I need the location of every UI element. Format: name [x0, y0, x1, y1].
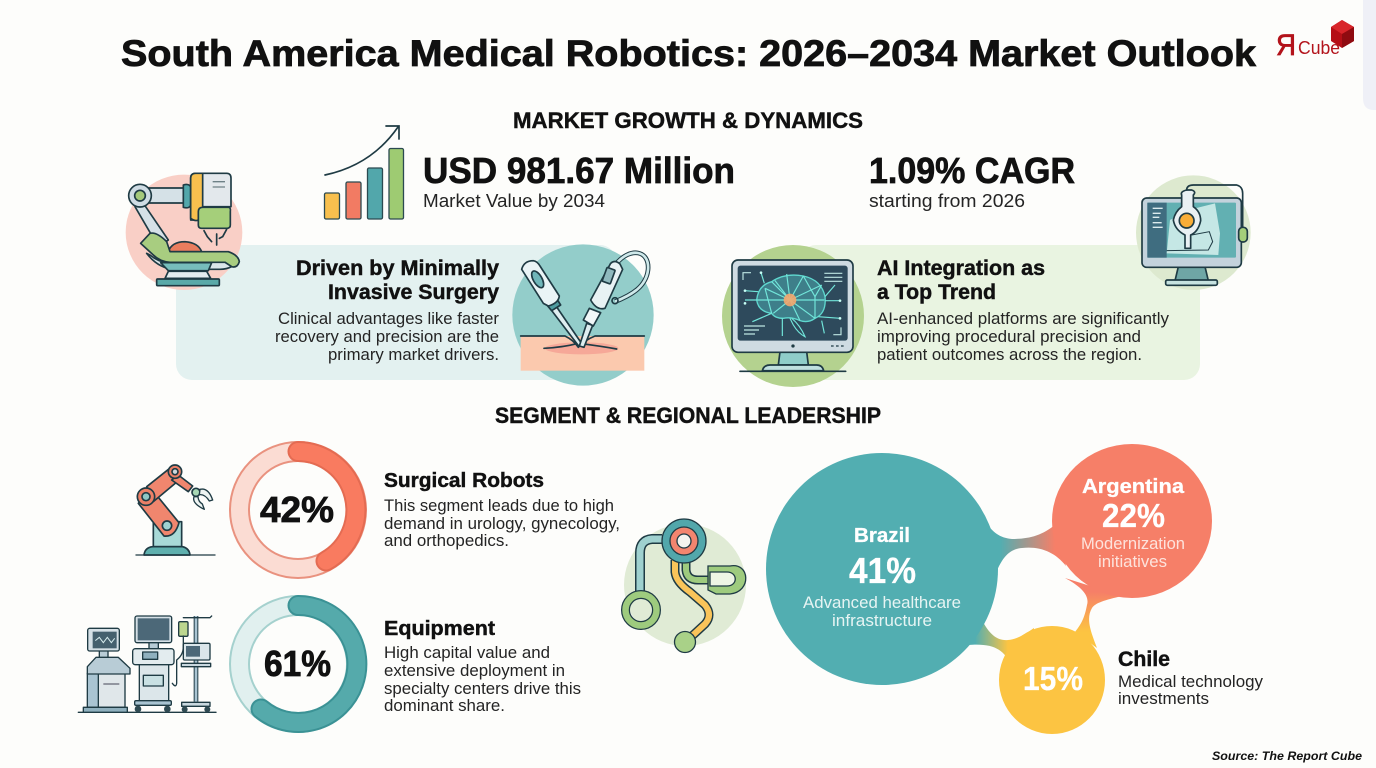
logo: RCube: Cube [1298, 38, 1340, 58]
text: equipment: extensive deployment in [384, 662, 565, 680]
text: Argentina [1081, 476, 1185, 571]
top right tab [1363, 0, 1376, 110]
text: AI description: AI-enhanced platforms are significantly [877, 310, 1170, 328]
text: Argentina: 22% [1102, 497, 1165, 534]
text: Chile: Chile [1118, 648, 1170, 671]
stat: CAGR: starting from 2026 [869, 191, 1025, 211]
text: equipment: specialty centers drive this [384, 680, 581, 698]
text: Brazil: Brazil [854, 525, 910, 547]
text: Chile: Medical technology [1118, 673, 1264, 691]
heading: segment leadership: SEGMENT & REGIONAL LEADERSHIP [495, 403, 881, 428]
text: equipment: High capital value and [384, 644, 550, 662]
text: surgical robots: and orthopedics. [384, 532, 509, 550]
text: equipment: dominant share. [384, 697, 505, 715]
panel: AI integration [800, 245, 1200, 380]
icon: medical equipment [78, 616, 216, 712]
icon: growth bar chart [324, 126, 404, 219]
text: Chile: investments [1118, 690, 1209, 708]
donut: equipment 61%: 61% [264, 643, 331, 684]
bubble: Chile [999, 626, 1105, 734]
stat: market value: Market Value by 2034 [423, 191, 605, 211]
logo: RCube [1276, 20, 1354, 62]
text: Argentina: Argentina [1082, 476, 1185, 498]
text: AI heading [877, 257, 1045, 304]
text: equipment: Equipment [384, 618, 495, 640]
text: Brazil: 41% [849, 550, 916, 591]
text: AI heading: a Top Trend [877, 281, 996, 304]
icon: surgical robot over patient [126, 173, 242, 290]
text: Brazil [803, 525, 961, 630]
icon: AI brain monitor [722, 245, 864, 387]
logo: RCube: R [1276, 29, 1296, 62]
text: Brazil: Advanced healthcare [803, 594, 961, 612]
connector: Argentina to Chile [1065, 578, 1122, 648]
panel: minimally invasive surgery [176, 244, 654, 386]
stat: CAGR [869, 150, 1075, 211]
text: surgery description: Clinical advantages like faster [278, 310, 500, 328]
chart: regional blobs [766, 444, 1212, 734]
text: surgery description [275, 310, 500, 364]
stat: CAGR: 1.09% CAGR [869, 150, 1075, 191]
text: Argentina: initiatives [1098, 553, 1167, 571]
connector: Brazil to Argentina [986, 522, 1066, 578]
connector: Brazil to Chile [968, 622, 1034, 665]
bubble: Brazil [766, 453, 998, 685]
text: Argentina: Modernization [1081, 535, 1185, 553]
icon: robotic arm [136, 465, 215, 555]
text: equipment [384, 618, 581, 715]
text: surgery heading: Invasive Surgery [328, 281, 499, 304]
heading: market growth: MARKET GROWTH & DYNAMICS [513, 108, 863, 133]
text: surgical robots: demand in urology, gynecology, [384, 515, 620, 533]
text: surgery heading: Driven by Minimally [296, 257, 499, 280]
icon: tubing network [624, 519, 746, 652]
text: AI description [877, 310, 1170, 364]
text: AI heading: AI Integration as [877, 257, 1045, 280]
donut: equipment 61% [240, 605, 357, 722]
text: AI description: patient outcomes across the region. [877, 346, 1142, 364]
donut: surgical robots 42%: 42% [260, 489, 334, 530]
text: surgical robots [384, 470, 620, 550]
text: Chile share: 15% [1023, 660, 1083, 697]
title: South America Medical Robotics: 2026–2034 Market Outlook [121, 33, 1256, 74]
text: surgery heading [296, 257, 499, 304]
text: Brazil: infrastructure [832, 612, 932, 630]
text: surgery description: primary market drivers. [328, 346, 499, 364]
stat: market value [423, 150, 735, 211]
icon: surgical instruments [512, 244, 654, 386]
source note: Source: The Report Cube [1212, 749, 1362, 763]
text: AI description: improving procedural precision and [877, 328, 1141, 346]
text: Chile [1118, 648, 1264, 708]
icon: robotic imaging monitor [1136, 175, 1251, 290]
stat: market value: USD 981.67 Million [423, 150, 735, 191]
text: surgery description: recovery and precision are the [275, 328, 499, 346]
bubble: Argentina [1052, 444, 1212, 598]
text: surgical robots: Surgical Robots [384, 470, 544, 492]
text: surgical robots: This segment leads due to high [384, 497, 614, 515]
donut: surgical robots 42% [240, 452, 356, 568]
